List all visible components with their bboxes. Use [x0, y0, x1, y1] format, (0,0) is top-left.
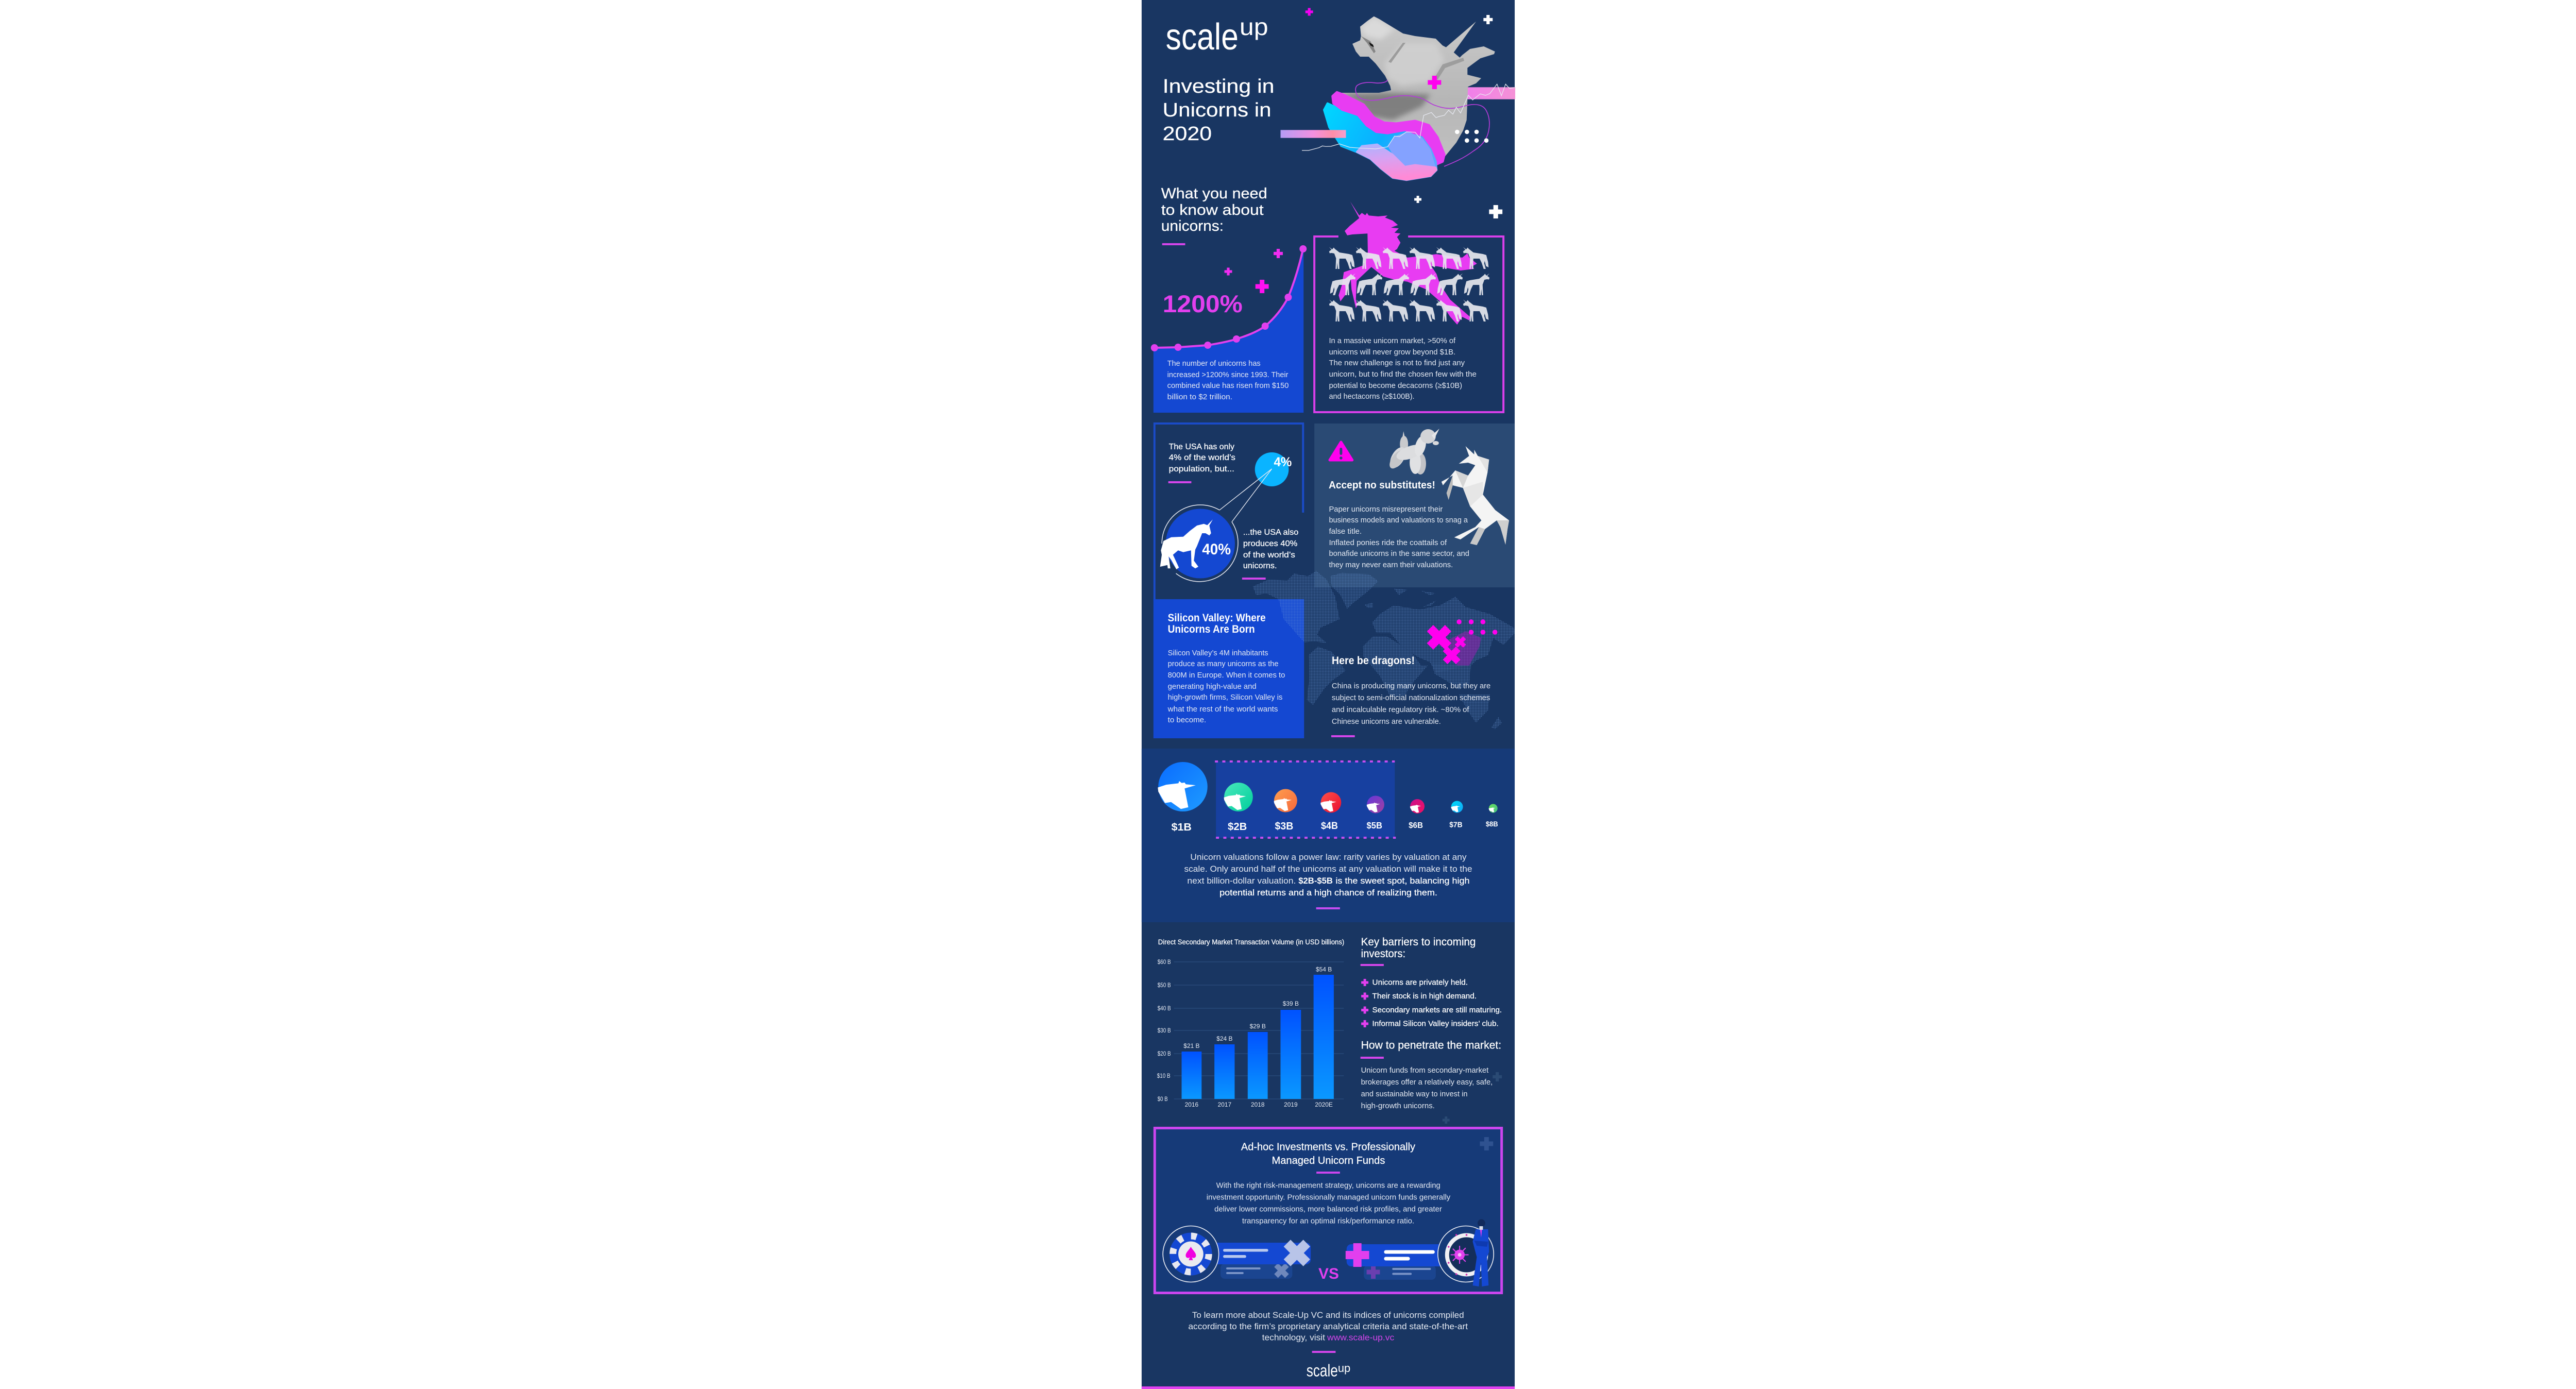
body text: and incalculable regulatory risk. ~80% of [1332, 705, 1469, 714]
heading: what you need to know: unicorns: [1161, 218, 1224, 234]
value labels: $39 B [1283, 1000, 1299, 1007]
circle 4%: 4% [1274, 455, 1292, 469]
body text [1207, 1181, 1451, 1226]
body text: With the right risk-management strategy, unicorns are a rewarding [1216, 1181, 1440, 1190]
valuation labels: $6B [1409, 821, 1423, 830]
cyan to pink blob [1324, 104, 1436, 180]
body text: transparency for an optimal risk/performance ratio. [1242, 1216, 1414, 1226]
body text: Silicon Valley’s 4M inhabitants [1168, 649, 1268, 657]
logo: scale up: up [1240, 13, 1268, 40]
title [1163, 76, 1275, 145]
footer logo: scale [1307, 1361, 1338, 1380]
y axis labels: $0 B [1158, 1095, 1168, 1103]
body text: high-growth firms, Silicon Valley is [1168, 693, 1282, 702]
closing text: according to the firm’s proprietary analytical criteria and state-of-the-art [1188, 1322, 1468, 1331]
heading: what you need to know: What you need [1161, 185, 1267, 202]
description: billion to $2 trillion. [1167, 393, 1232, 401]
USA 4 percent vs 40 percent [1160, 443, 1298, 582]
description [1329, 336, 1477, 401]
bars [1182, 975, 1334, 1099]
dotted world map [1253, 571, 1515, 729]
circle 40% with unicorn: 40% [1202, 541, 1231, 558]
panel frame [1155, 1128, 1502, 1293]
ad-hoc bar [1210, 1233, 1316, 1273]
blue area under curve [1154, 249, 1303, 413]
Silicon Valley text [1167, 612, 1285, 724]
faint plus [1480, 1137, 1493, 1150]
magenta crosses [1421, 619, 1469, 668]
grid of small unicorns [1329, 247, 1489, 321]
y axis labels: $40 B [1158, 1005, 1171, 1012]
bullet list: Secondary markets are still maturing. [1372, 1006, 1502, 1014]
body text: subject to semi-official nationalization schemes [1332, 693, 1490, 702]
description: The new challenge is not to find just any [1329, 359, 1465, 367]
year labels [1185, 1101, 1333, 1108]
panel: growth curve 1200% [1151, 245, 1307, 413]
large magenta unicorn [1338, 201, 1477, 325]
body text [1361, 1066, 1493, 1110]
body text: 800M in Europe. When it comes to [1168, 671, 1285, 680]
power law text: $2B-$5B [1298, 876, 1333, 886]
body text: high-growth unicorns. [1361, 1102, 1435, 1110]
y axis labels: $20 B [1158, 1050, 1171, 1057]
body text: and sustainable way to invest in [1361, 1090, 1468, 1098]
body text [1332, 682, 1490, 726]
callout lines [1219, 469, 1272, 522]
closing text [1188, 1310, 1468, 1343]
body text: Inflated ponies ride the coattails of [1329, 538, 1447, 547]
y axis labels: $30 B [1158, 1027, 1171, 1034]
bullet list: Unicorns are privately held. [1372, 978, 1468, 987]
power law text: potential returns and a high chance of realizing them. [1219, 888, 1437, 897]
valuation labels: $3B [1275, 821, 1293, 832]
magenta plus on bust [1428, 76, 1441, 89]
body text: business models and valuations to snag a [1329, 516, 1468, 524]
text: unicorns: ...the USA also [1243, 528, 1298, 537]
body text: they may never earn their valuations. [1329, 561, 1453, 569]
circle 4% [1255, 452, 1292, 486]
logo: scale up: scale [1166, 16, 1239, 58]
managed bar [1346, 1243, 1449, 1267]
valuation circles [1158, 762, 1498, 814]
power law text: Unicorn valuations follow a power law: rarity varies by valuation at any [1190, 852, 1467, 862]
panel: accept no substitutes background [1314, 424, 1515, 587]
white dots [1455, 130, 1488, 143]
heading: Ad-hoc Investments vs. Professionally [1241, 1141, 1415, 1153]
valuation labels: $2B [1228, 821, 1247, 833]
heading: what you need to know [1161, 185, 1267, 245]
text: unicorns: unicorns. [1243, 562, 1277, 570]
description: combined value has risen from $150 [1167, 381, 1289, 390]
China highlight [1438, 631, 1481, 666]
year labels: 2020E [1315, 1101, 1333, 1108]
title: 2020 [1163, 123, 1212, 145]
heading: what you need to know: to know about [1161, 202, 1264, 218]
valuation labels: $1B [1172, 822, 1192, 833]
body text: generating high-value and [1168, 682, 1257, 691]
balloon unicorn [1387, 429, 1439, 475]
body text [1167, 649, 1285, 724]
year labels: 2019 [1284, 1101, 1298, 1108]
body text: Unicorn funds from secondary-market [1361, 1066, 1489, 1075]
heading [1241, 1141, 1415, 1174]
chart title: Direct Secondary Market Transaction Volume (in USD billions) [1158, 938, 1344, 946]
magenta blob [1333, 92, 1444, 164]
pink bar right [1467, 87, 1515, 99]
description [1167, 359, 1289, 401]
power law text: is the sweet spot, balancing high [1335, 876, 1469, 886]
body text: Paper unicorns misrepresent their [1329, 505, 1443, 514]
Here be dragons [1331, 619, 1498, 737]
valuation labels [1172, 820, 1498, 833]
faint managed bar [1364, 1265, 1436, 1280]
bottom magenta bar [1142, 1386, 1515, 1389]
text: unicorns [1242, 528, 1298, 580]
stat 1200%: 1200% [1163, 291, 1243, 317]
closing divider [1312, 1351, 1335, 1353]
panel: USA outline frame [1155, 424, 1303, 600]
description: The number of unicorns has [1167, 359, 1261, 368]
infographic background panel [1142, 0, 1515, 1389]
heading: Key barriers to incoming [1361, 936, 1476, 948]
magenta frame with gap [1314, 236, 1503, 412]
decorative plus signs, top [1306, 8, 1502, 218]
valuation labels: $5B [1367, 820, 1382, 831]
description: In a massive unicorn market, >50% of [1329, 336, 1456, 345]
year labels: 2018 [1251, 1101, 1265, 1108]
value labels: $54 B [1316, 965, 1332, 973]
bullet list: Informal Silicon Valley insiders’ club. [1372, 1019, 1499, 1028]
y axis labels: $60 B [1158, 958, 1171, 965]
body text: to become. [1168, 716, 1206, 724]
body text: what the rest of the world wants [1167, 705, 1278, 714]
body text: Chinese unicorns are vulnerable. [1332, 717, 1441, 726]
value labels: $29 B [1250, 1023, 1266, 1030]
body text: brokerages offer a relatively easy, safe, [1361, 1078, 1493, 1087]
origami unicorn [1442, 446, 1509, 545]
body text: China is producing many unicorns, but they are [1332, 682, 1490, 690]
power law text: scale. Only around half of the unicorns at any valuation will make it to the [1184, 864, 1472, 874]
y axis labels [1157, 958, 1171, 1103]
valuation labels: $4B [1321, 821, 1338, 832]
body text: investment opportunity. Professionally managed unicorn funds generally [1207, 1193, 1451, 1202]
body text: bonafide unicorns in the same sector, and [1329, 549, 1469, 558]
heading: Silicon Valley: Where [1168, 612, 1266, 624]
description: and hectacorns (≥$100B). [1329, 392, 1415, 401]
plus signs [1225, 249, 1283, 293]
text: population: 4% of the world’s [1169, 453, 1235, 462]
power law text: next billion-dollar valuation. [1187, 876, 1296, 886]
text: unicorns: of the world’s [1243, 551, 1295, 560]
grey unicorn bust [1341, 16, 1495, 156]
y axis labels: $50 B [1158, 981, 1171, 989]
bar chart: direct secondary market transaction volume [1157, 938, 1344, 1108]
valuation labels: $7B [1449, 820, 1463, 829]
magenta dots [1456, 619, 1498, 635]
faint ad-hoc bar [1221, 1260, 1293, 1281]
website link: www.scale-up.vc [1327, 1332, 1395, 1343]
text: population: population, but... [1169, 465, 1234, 473]
description: potential to become decacorns (≥$10B) [1329, 381, 1462, 390]
sweet spot highlight [1215, 761, 1396, 838]
accept no substitutes content [1329, 429, 1509, 569]
panel: Silicon Valley box [1154, 599, 1304, 738]
heading [1361, 936, 1476, 966]
icon: warning triangle [1330, 442, 1352, 460]
vault icon [1438, 1226, 1494, 1282]
value labels: $21 B [1183, 1042, 1199, 1049]
curve line with dots [1151, 245, 1307, 351]
hero illustration: unicorn bust with gradient blobs [1281, 16, 1515, 180]
full infographic [1142, 0, 1515, 1389]
faint plus signs [1443, 1072, 1502, 1124]
panel: massive unicorn market [1314, 201, 1503, 412]
text: unicorns: produces 40% [1243, 539, 1297, 548]
body text: false title. [1329, 527, 1362, 536]
title: Unicorns in [1163, 99, 1272, 121]
heading: Accept no substitutes! [1329, 480, 1435, 491]
purple curve [1355, 80, 1489, 166]
text: population [1168, 443, 1235, 483]
bullet list: Their stock is in high demand. [1372, 992, 1477, 1001]
body text [1329, 505, 1469, 569]
valuation labels: $8B [1486, 820, 1498, 828]
description: unicorns will never grow beyond $1B. [1329, 348, 1455, 357]
footer logo: up [1338, 1362, 1350, 1375]
key barriers [1361, 936, 1502, 1028]
heading: Managed Unicorn Funds [1272, 1155, 1385, 1166]
bullet list [1361, 978, 1502, 1028]
closing text: technology, visit [1262, 1332, 1325, 1343]
year labels: 2016 [1185, 1101, 1199, 1108]
power law text [1184, 852, 1472, 897]
title: Investing in [1163, 76, 1275, 97]
value labels: $24 B [1216, 1035, 1232, 1042]
description: unicorn, but to find the chosen few with the [1329, 370, 1477, 379]
poker chip icon [1163, 1226, 1219, 1282]
section: power law valuations [1142, 749, 1515, 922]
body text: produce as many unicorns as the [1168, 659, 1278, 668]
year labels: 2017 [1218, 1101, 1231, 1108]
section background [1142, 749, 1515, 922]
how to penetrate the market [1361, 1039, 1502, 1124]
businessman [1472, 1219, 1489, 1286]
y axis labels: $10 B [1157, 1072, 1171, 1079]
heading: Unicorns Are Born [1168, 623, 1255, 635]
VS label: VS [1318, 1265, 1339, 1282]
closing text: To learn more about Scale-Up VC and its indices of unicorns compiled [1192, 1310, 1464, 1320]
text: population: The USA has only [1169, 443, 1234, 451]
description: increased >1200% since 1993. Their [1167, 370, 1288, 379]
heading: How to penetrate the market: [1361, 1039, 1501, 1052]
pink bar left [1281, 130, 1346, 138]
heading: investors: [1361, 948, 1405, 960]
heading [1168, 612, 1266, 635]
circle 40% with unicorn [1160, 505, 1238, 582]
white line chart [1302, 84, 1515, 150]
body text: deliver lower commissions, more balanced risk profiles, and greater [1214, 1205, 1442, 1214]
value labels [1183, 965, 1332, 1049]
panel: ad-hoc vs managed funds [1155, 1128, 1502, 1293]
heading: Here be dragons! [1332, 655, 1415, 667]
